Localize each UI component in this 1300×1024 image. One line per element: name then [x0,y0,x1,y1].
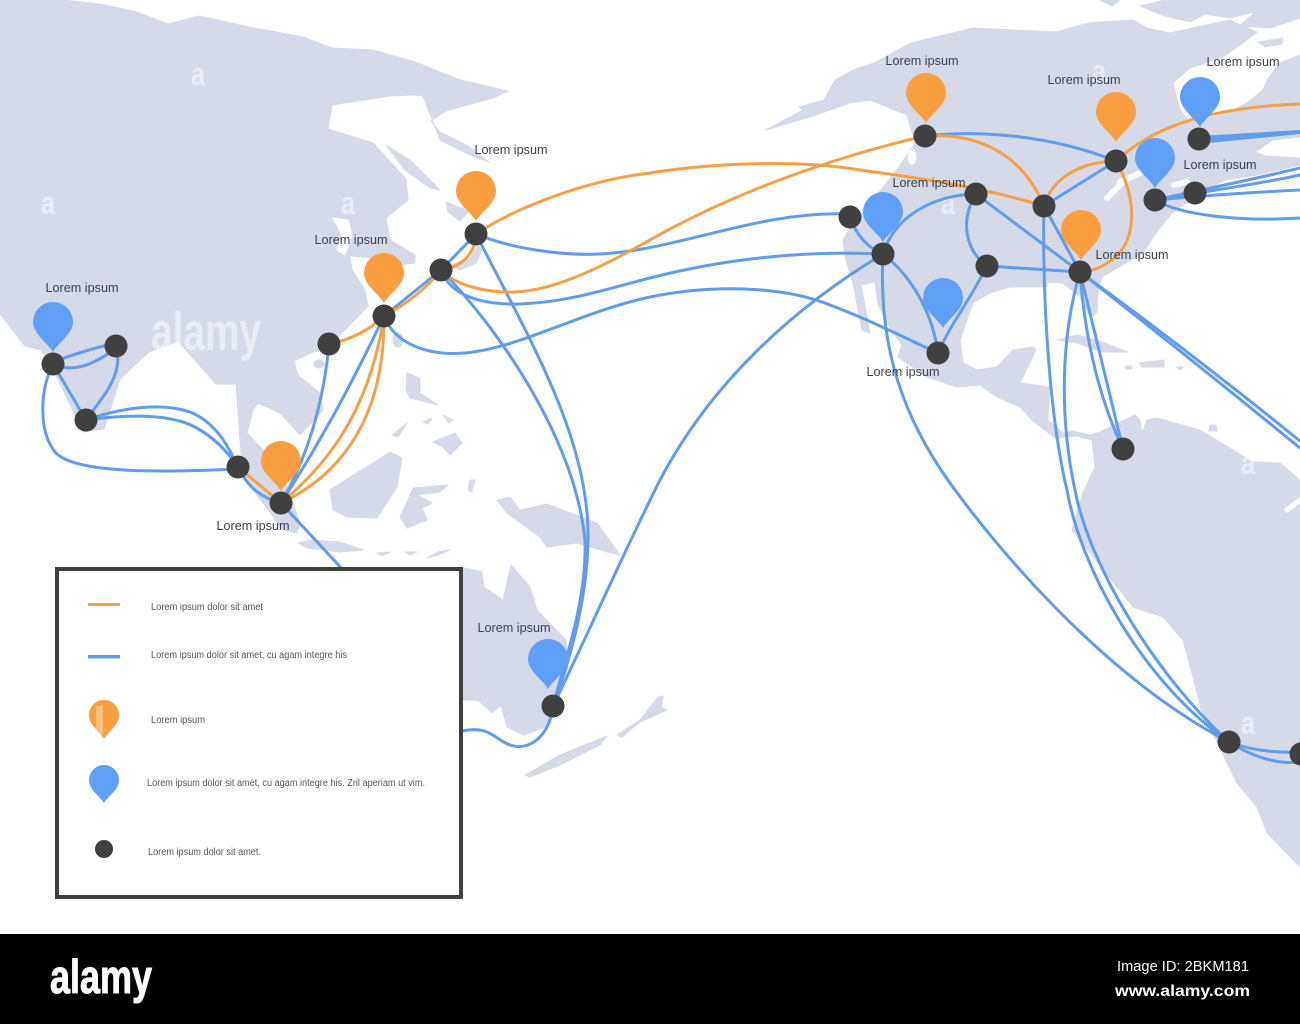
legend: blue pin text: Lorem ipsum dolor sit amet, cu agam integre his. Zril aperiam ut vim. [147,778,425,789]
land: islands of south east asia [298,373,620,558]
land: arctic islands [1100,0,1300,47]
land: new zealand [525,696,667,777]
land: australia [440,565,568,735]
watermarks on land: a [941,185,955,221]
land: caribbean islands [1057,335,1217,431]
pin: orange [906,73,946,123]
pin: orange [261,441,301,491]
legend: orange line text: Lorem ipsum dolor sit amet [151,602,263,613]
watermarks on land: a [41,185,55,221]
land: sakhalin and japan [386,145,482,270]
legend: node text: Lorem ipsum dolor sit amet. [148,847,261,858]
place labels: Lorem ipsum [1096,247,1168,262]
place labels: Lorem ipsum [314,232,388,247]
pin: orange [1061,210,1101,260]
legend: orange pin [89,700,119,739]
legend: node [95,840,113,858]
place labels: Lorem ipsum [1048,72,1120,87]
watermarks on land: a [1241,705,1255,741]
pin: blue [1180,77,1220,127]
place labels: Lorem ipsum [1184,157,1256,172]
pin: blue [33,302,73,352]
orange cable routes [238,104,1300,503]
footer: url: www.alamy.com [1114,983,1250,1000]
pin: orange [456,171,496,221]
place labels: Lorem ipsum [216,518,290,533]
panel: legend [57,569,461,897]
pin: blue [923,278,963,328]
watermarks on land: alamy [151,302,261,362]
place labels: Lorem ipsum [866,364,940,379]
pin: blue [863,192,903,242]
place labels: Lorem ipsum [474,142,548,157]
watermarks on land: a [341,185,355,221]
legend: blue line text: Lorem ipsum dolor sit amet, cu agam integre his [151,650,347,661]
pin: orange [1096,92,1136,142]
place labels: Lorem ipsum [478,620,550,635]
place labels: Lorem ipsum [892,175,966,190]
place labels: Lorem ipsum [886,53,958,68]
blue cable routes [43,130,1300,763]
watermarks on land: a [191,56,205,92]
network nodes [42,124,1300,766]
land: asia [0,0,508,533]
place labels: Lorem ipsum [1206,54,1280,69]
legend: orange line [88,603,120,606]
watermarks on land: a [1241,445,1255,481]
place labels: Lorem ipsum [46,280,118,295]
legend: orange pin text: Lorem ipsum [151,715,205,726]
footer bar [0,934,1300,1024]
watermarks on land: a [1092,53,1106,89]
place labels [46,53,1280,635]
pin: blue [1135,138,1175,188]
legend: blue pin [89,765,119,803]
watermarks on land [41,53,1255,741]
pin: blue [528,639,568,689]
legend: blue line [88,655,120,658]
water: lakes and bays [333,150,1300,510]
land: north and south america [766,20,1300,867]
footer: image id: Image ID: 2BKM181 [1117,958,1249,975]
location pins [33,73,1220,689]
pin: orange [364,253,404,303]
footer: logo: alamy [50,950,152,1003]
